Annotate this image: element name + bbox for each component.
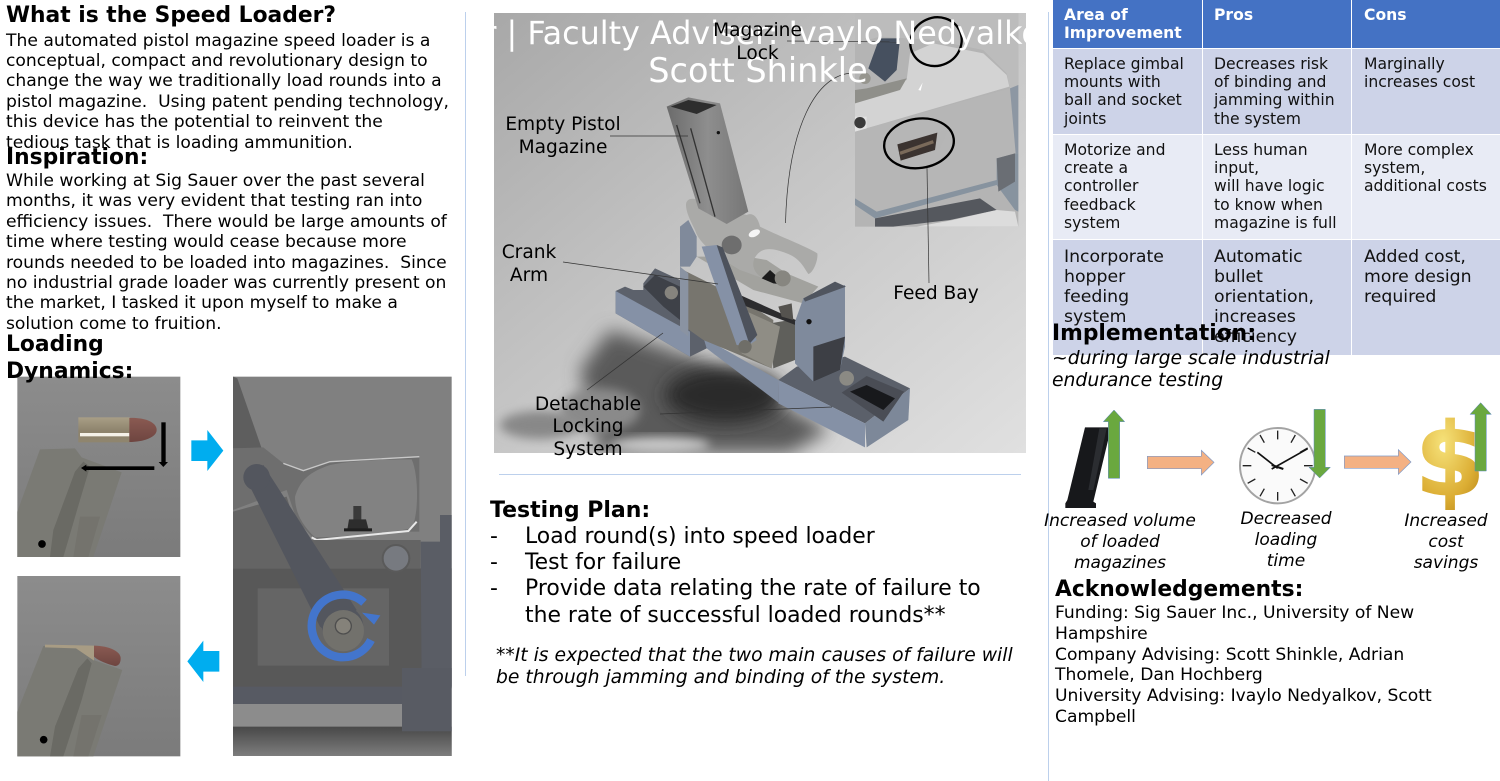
label: Magazine Lock: Magazine — [713, 20, 802, 41]
table: areas of improvement: joints — [1064, 110, 1106, 128]
table: areas of improvement: to know when — [1214, 196, 1323, 214]
table: areas of improvement: required — [1364, 287, 1436, 307]
base and right rail — [703, 337, 910, 447]
flow diagram: implementation — [1065, 401, 1492, 518]
table: areas of improvement: More complex — [1364, 141, 1474, 159]
text block: inspiration: time where testing would cease because more — [6, 232, 407, 252]
caption: increased volume: Increased volume — [1044, 511, 1196, 531]
text block: speed loader description: conceptual, compact and revolutionary design to — [6, 51, 428, 71]
icon: bullet — [78, 417, 157, 442]
text block: inspiration: months, it was very evident that testing ran into — [6, 191, 422, 211]
label: Empty Pistol Magazine — [505, 114, 621, 158]
text block: speed loader description: tedious task that is loading ammunition. — [6, 133, 353, 153]
table: areas of improvement: feedback — [1064, 196, 1136, 214]
table: areas of improvement — [1053, 0, 1500, 355]
table: areas of improvement: Pros — [1214, 6, 1253, 24]
heading: Testing Plan: Testing Plan: — [490, 498, 650, 523]
table: areas of improvement: increases cost — [1364, 73, 1475, 91]
label: Detachable Locking System: Locking — [552, 416, 624, 437]
table: areas of improvement: bullet — [1214, 267, 1263, 287]
table: areas of improvement: magazine is full — [1214, 214, 1337, 232]
text: implementation note: ~during large scale industrial — [1052, 348, 1330, 369]
table: areas of improvement: input, — [1214, 159, 1259, 177]
label: Crank Arm — [502, 242, 556, 286]
text block: speed loader description — [6, 30, 449, 153]
list: testing plan: - — [490, 550, 498, 575]
panel: round above magazine — [17, 377, 180, 557]
icon: magazine hole — [38, 540, 46, 548]
table: areas of improvement: Less human — [1214, 141, 1308, 159]
table: areas of improvement: feeding — [1064, 287, 1129, 307]
label: Detachable Locking System: Detachable — [535, 394, 641, 414]
icon: dollar sign: $ — [1415, 401, 1485, 518]
heading: Implementation: Implementation: — [1052, 321, 1256, 346]
table: areas of improvement: Added cost, — [1364, 246, 1466, 266]
heading: What is the Speed Loader: What is the Speed Loader? — [6, 3, 336, 28]
table: areas of improvement: increases — [1214, 307, 1296, 327]
arrow: green down — [1309, 409, 1330, 478]
text block: inspiration: While working at Sig Sauer over the past several — [6, 171, 425, 191]
caption: decreased loading time: Decreased — [1240, 509, 1332, 529]
table: areas of improvement: controller — [1064, 177, 1138, 195]
figure: speed loader render — [494, 13, 1026, 453]
list: testing plan: - — [490, 524, 498, 548]
note: expected causes of failure: **It is expected that the two main causes of failure will — [496, 644, 1013, 666]
arrow: orange right — [1344, 450, 1411, 474]
callout circles — [881, 9, 970, 173]
overlay title: faculty adviser — [494, 15, 1026, 90]
label: Magazine Lock — [713, 20, 802, 64]
caption: increased cost savings: Increased — [1404, 511, 1488, 531]
heading: Loading Dynamics — [6, 332, 133, 384]
icon: pistol magazine — [1065, 427, 1109, 508]
pistol magazine — [667, 97, 748, 224]
text block: speed loader description: change the way we traditionally load rounds into a — [6, 71, 442, 91]
table: areas of improvement: jamming within — [1214, 91, 1335, 109]
table: areas of improvement: hopper — [1064, 267, 1125, 287]
heading: Loading Dynamics: Dynamics: — [6, 359, 133, 384]
table: areas of improvement: Improvement — [1064, 24, 1182, 42]
crank arm — [702, 245, 757, 353]
table: areas of improvement: additional costs — [1364, 177, 1487, 195]
table: areas of improvement: system — [1064, 307, 1126, 327]
grip and lever — [686, 199, 817, 286]
label: Magazine Lock: Lock — [736, 43, 779, 64]
table: areas of improvement: Area of — [1064, 6, 1128, 24]
caption: decreased loading time — [1240, 509, 1332, 571]
table: areas of improvement: Automatic — [1214, 246, 1303, 266]
arrow: blue right — [191, 430, 223, 471]
text: acknowledgements: Hampshire — [1055, 624, 1148, 644]
arrow: orange right — [1147, 450, 1214, 475]
table: areas of improvement: orientation, — [1214, 287, 1314, 307]
left rail — [616, 268, 707, 357]
label: Crank Arm: Crank — [502, 242, 556, 263]
caption: increased volume — [1044, 511, 1196, 573]
table: areas of improvement: Replace gimbal — [1064, 55, 1184, 73]
panel: round seated in magazine — [17, 576, 180, 756]
caption: increased cost savings: savings — [1414, 553, 1478, 573]
table: areas of improvement: Motorize and — [1064, 141, 1165, 159]
list: testing plan: Test for failure — [525, 550, 681, 575]
table: areas of improvement: will have logic — [1214, 177, 1325, 195]
text: implementation note: endurance testing — [1052, 370, 1223, 391]
right upright — [795, 282, 846, 382]
text: implementation note — [1052, 348, 1330, 391]
caption: decreased loading time: loading — [1255, 530, 1317, 550]
text: acknowledgements — [1054, 603, 1432, 727]
label: Empty Pistol Magazine: Empty Pistol — [505, 114, 621, 135]
list: testing plan: the rate of successful loaded rounds** — [525, 603, 946, 628]
icon: rotation arrow — [312, 595, 380, 657]
caption: decreased loading time: time — [1267, 551, 1305, 571]
leader lines — [563, 41, 929, 414]
heading: Loading Dynamics: Loading — [6, 332, 104, 357]
list: testing plan: - — [490, 576, 498, 601]
arrow: green up — [1470, 403, 1491, 471]
cast shadow — [500, 330, 830, 453]
heading: Acknowledgements: Acknowledgements: — [1055, 577, 1303, 602]
caption: increased cost savings: cost — [1428, 532, 1464, 552]
text block: inspiration: no industrial grade loader was currently present on — [6, 273, 446, 293]
note: expected causes of failure — [496, 644, 1013, 688]
text block: inspiration: the market, I tasked it upon myself to make a — [6, 293, 398, 313]
inset: magazine lock and feed bay — [854, 9, 1018, 227]
arrow: blue left — [187, 641, 219, 682]
caption: increased volume: magazines — [1074, 553, 1166, 573]
table: areas of improvement: Cons — [1364, 6, 1407, 24]
table: areas of improvement: ball and socket — [1064, 91, 1182, 109]
table: areas of improvement: create a — [1064, 159, 1128, 177]
caption: increased cost savings — [1404, 511, 1488, 573]
text: acknowledgements: Thomele, Dan Hochberg — [1055, 665, 1263, 685]
list: testing plan — [490, 524, 981, 628]
table: areas of improvement: the system — [1214, 110, 1301, 128]
diagram: loading dynamics images — [17, 376, 452, 756]
caption: increased volume: of loaded — [1080, 532, 1160, 552]
heading: Inspiration: Inspiration: — [6, 145, 148, 170]
text block: speed loader description: this device has the potential to reinvent the — [6, 112, 383, 132]
table: areas of improvement: of binding and — [1214, 73, 1326, 91]
table: areas of improvement: Incorporate — [1064, 246, 1164, 266]
label: Empty Pistol Magazine: Magazine — [519, 137, 607, 158]
table: areas of improvement: efficiency — [1214, 327, 1297, 347]
icon: clock — [1240, 428, 1315, 503]
arrow: down then left — [81, 422, 168, 472]
list: testing plan: Load round(s) into speed loader — [525, 524, 875, 548]
centre block — [680, 220, 818, 368]
table: areas of improvement: system — [1064, 214, 1120, 232]
text: acknowledgements: Campbell — [1055, 707, 1136, 727]
label: Crank Arm: Arm — [510, 265, 548, 286]
table: areas of improvement: Marginally — [1364, 55, 1445, 73]
text block: speed loader description: pistol magazine. Using patent pending technology, — [6, 92, 449, 112]
text block: inspiration: solution come to fruition. — [6, 314, 222, 334]
list: testing plan: Provide data relating the rate of failure to — [525, 576, 981, 601]
label: Feed Bay: Feed Bay — [893, 283, 979, 304]
panel: crank arm close-up — [233, 377, 452, 756]
table: areas of improvement: mounts with — [1064, 73, 1161, 91]
note: expected causes of failure: be through jamming and binding of the system. — [496, 667, 945, 688]
arrow: green up — [1103, 410, 1125, 478]
text block: inspiration: efficiency issues. There would be large amounts of — [6, 212, 447, 232]
label: Detachable Locking System: System — [553, 439, 623, 460]
device — [616, 97, 910, 447]
text: acknowledgements: University Advising: Ivaylo Nedyalkov, Scott — [1055, 686, 1432, 706]
text block: speed loader description: The automated pistol magazine speed loader is a — [6, 30, 430, 50]
text: acknowledgements: Company Advising: Scott Shinkle, Adrian — [1055, 645, 1404, 665]
overlay title: faculty adviser: Scott Shinkle — [648, 51, 868, 90]
table: areas of improvement: more design — [1364, 267, 1472, 287]
table: areas of improvement: system, — [1364, 159, 1425, 177]
table: areas of improvement: Decreases risk — [1214, 55, 1328, 73]
text block: inspiration — [6, 171, 448, 334]
label: Detachable Locking System — [535, 394, 641, 460]
text: acknowledgements: Funding: Sig Sauer Inc., University of New — [1055, 603, 1414, 623]
text block: inspiration: rounds needed to be loaded into magazines. Since — [6, 253, 447, 273]
